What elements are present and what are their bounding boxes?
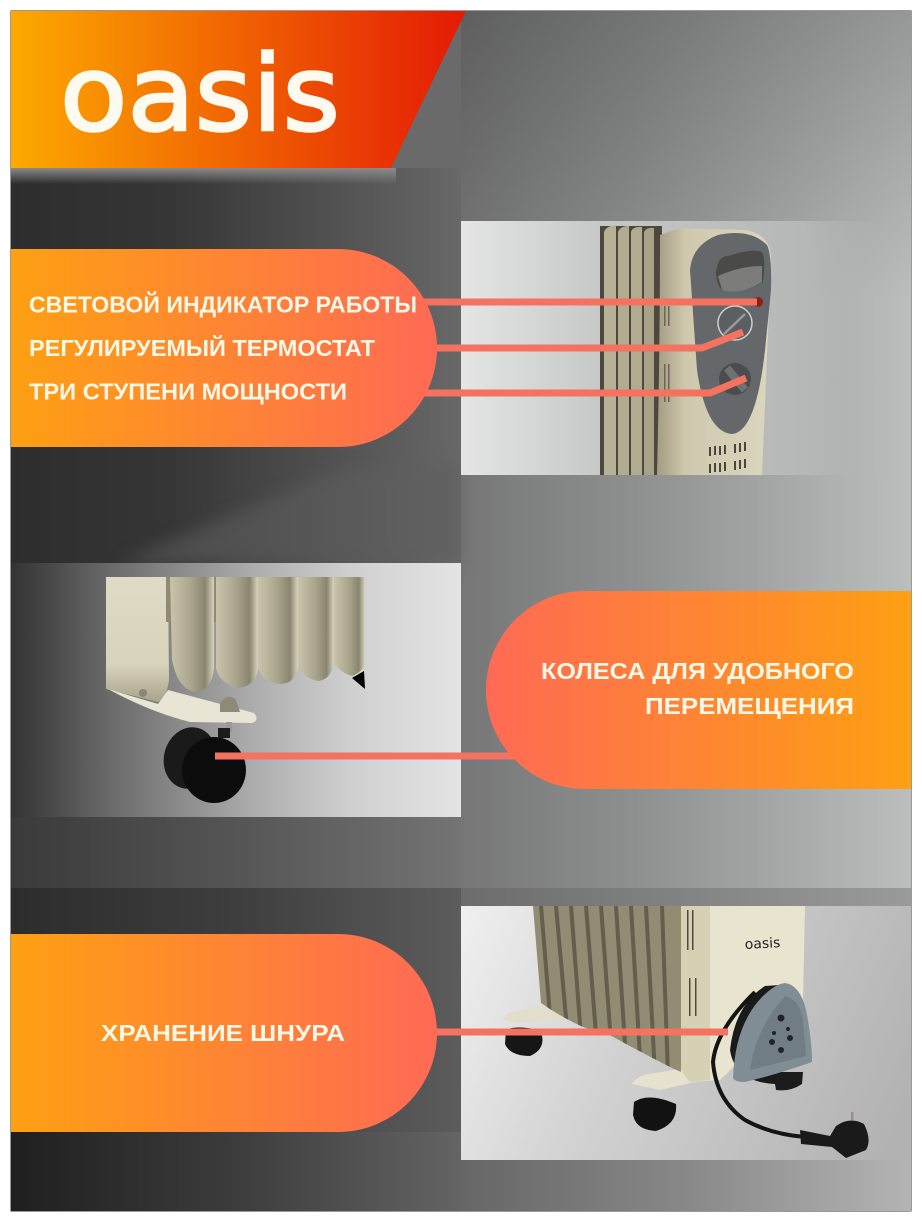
body side	[681, 906, 710, 1082]
heater body	[657, 228, 771, 475]
thermostat dial	[718, 306, 752, 340]
label: thermostat: РЕГУЛИРУЕМЫЙ ТЕРМОСТАТ	[29, 334, 376, 361]
radiator fins	[166, 577, 365, 692]
nut	[220, 697, 240, 712]
logo banner	[11, 11, 466, 168]
front bracket	[632, 1068, 712, 1090]
photo: cord storage	[461, 906, 911, 1160]
wheel	[157, 721, 246, 803]
wheel axle	[226, 722, 232, 732]
pill: cord	[11, 934, 437, 1132]
label: wheels: ПЕРЕМЕЩЕНИЯ	[645, 693, 854, 719]
indicator light	[753, 297, 763, 307]
logo wordmark: oasis	[60, 33, 340, 155]
fins	[533, 906, 681, 1076]
bracket	[108, 689, 257, 723]
pill: wheels	[486, 591, 911, 789]
handle recess	[716, 251, 764, 292]
photo: control panel of heater	[461, 221, 891, 475]
printed logo: oasis	[744, 935, 781, 953]
plug pin	[851, 1112, 854, 1120]
label: cord storage: ХРАНЕНИЕ ШНУРА	[101, 1020, 345, 1046]
lower vents	[709, 442, 746, 473]
side vents	[664, 306, 670, 402]
reel cover	[733, 983, 812, 1082]
label: wheels	[541, 658, 854, 719]
reel cover inset	[750, 996, 806, 1070]
power dial	[719, 363, 751, 395]
side vents	[687, 910, 696, 1016]
cord	[713, 992, 805, 1137]
control panel	[690, 233, 771, 434]
rivet	[139, 689, 147, 697]
label: wheels: КОЛЕСА ДЛЯ УДОБНОГО	[541, 658, 854, 684]
cord reel	[730, 985, 780, 1084]
photo: wheel	[11, 563, 461, 817]
heater side panel	[106, 577, 169, 702]
reel holes	[769, 1014, 793, 1053]
rear wheel	[505, 1028, 542, 1056]
heater fins	[600, 225, 662, 475]
rear bracket	[503, 1006, 568, 1023]
power dial pointer	[727, 368, 745, 390]
pointer lines	[215, 302, 757, 1032]
plug	[800, 1120, 869, 1158]
label: power: ТРИ СТУПЕНИ МОЩНОСТИ	[29, 378, 347, 404]
front wheel	[633, 1097, 676, 1131]
pill: indicators	[11, 249, 437, 447]
thermostat dial pointer	[724, 314, 745, 334]
small wheel	[773, 1072, 803, 1090]
body	[681, 906, 805, 1082]
label: indicator: СВЕТОВОЙ ИНДИКАТОР РАБОТЫ	[29, 290, 417, 318]
